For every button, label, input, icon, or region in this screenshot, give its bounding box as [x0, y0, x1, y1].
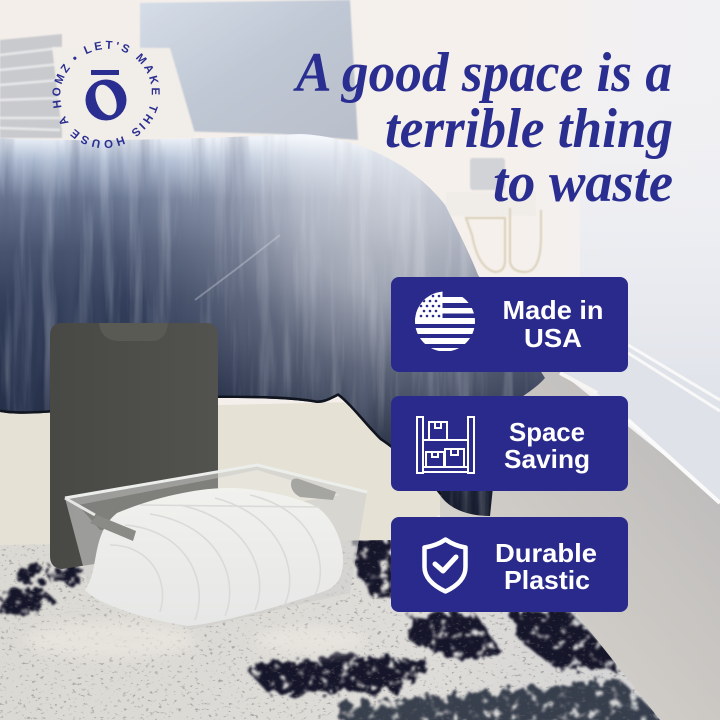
title: to waste: [493, 152, 673, 214]
title: [293, 42, 673, 214]
blanket: [85, 488, 343, 626]
side table: [446, 158, 541, 272]
storage lid: [50, 323, 218, 569]
icon: shelf with boxes: [417, 417, 474, 473]
title: A good space is a: [293, 42, 672, 104]
badge: space saving: [391, 396, 628, 491]
comforter: [0, 130, 560, 520]
badge: durable plastic: [391, 517, 628, 612]
floor: [440, 372, 720, 720]
badge: durable plastic: Durable: [495, 538, 597, 568]
badge: space saving: Space: [509, 417, 585, 447]
logo mark: [86, 70, 126, 120]
title: terrible thing: [385, 98, 673, 160]
logo badge: [52, 40, 160, 148]
circular tagline: • LET'S MAKE THIS HOUSE A HOMZ: [52, 40, 160, 148]
icon: shield with check: [424, 540, 466, 592]
baseboard: [560, 345, 720, 503]
bed skirt: [0, 400, 440, 546]
badge: durable plastic: Plastic: [504, 565, 590, 595]
icon: US flag globe: [415, 291, 475, 352]
rug dark patches: [0, 538, 670, 720]
pillows: [0, 0, 358, 140]
wall right side: [580, 0, 720, 410]
clear storage bin with blanket: [65, 465, 367, 630]
badge: made in USA: Made in: [502, 295, 604, 325]
badge: space saving: Saving: [504, 444, 590, 474]
rug: [0, 538, 720, 720]
badge: made in USA: [391, 277, 628, 372]
badge: made in USA: USA: [524, 323, 582, 353]
